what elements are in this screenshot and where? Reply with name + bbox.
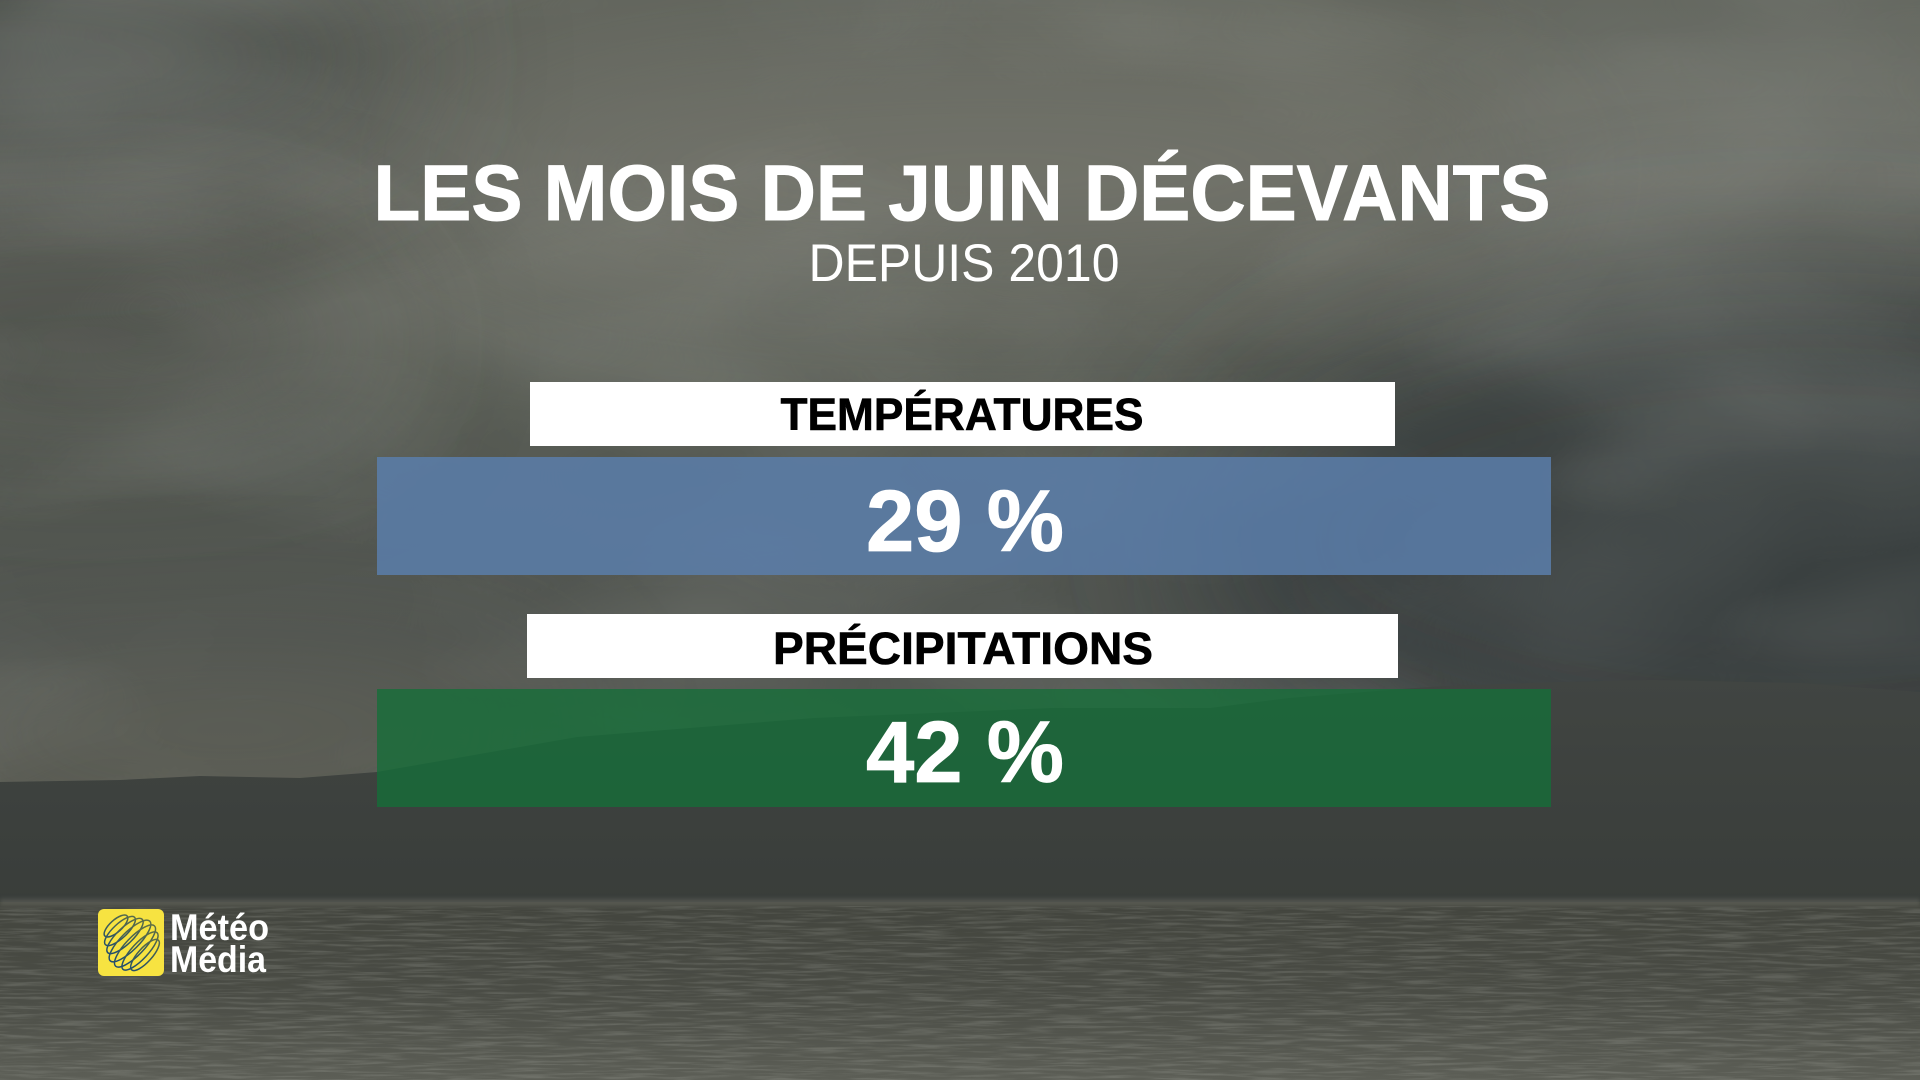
label box: temperatures: TEMPÉRATURES (780, 389, 1144, 440)
panel: precipitation (377, 614, 1551, 807)
icon: yellow globe badge (98, 909, 164, 976)
subtitle: DEPUIS 2010 (808, 234, 1120, 293)
title: LES MOIS DE JUIN DÉCEVANTS (374, 148, 1550, 237)
label box: precipitation: PRÉCIPITATIONS (773, 623, 1153, 674)
panel: temperatures (377, 382, 1551, 575)
value bar: temperatures 29 %: 29 % (866, 473, 1064, 570)
value bar: precipitation 42 %: 42 % (866, 704, 1064, 801)
logo wordmark: Météo (170, 907, 269, 948)
value bar: temperatures 29 % (377, 457, 1551, 575)
label box: precipitation (527, 614, 1398, 678)
label box: temperatures (530, 382, 1395, 446)
logo: MétéoMédia (98, 907, 269, 980)
logo wordmark: Média (170, 939, 266, 980)
logo wordmark (170, 907, 269, 980)
value bar: precipitation 42 % (377, 689, 1551, 807)
